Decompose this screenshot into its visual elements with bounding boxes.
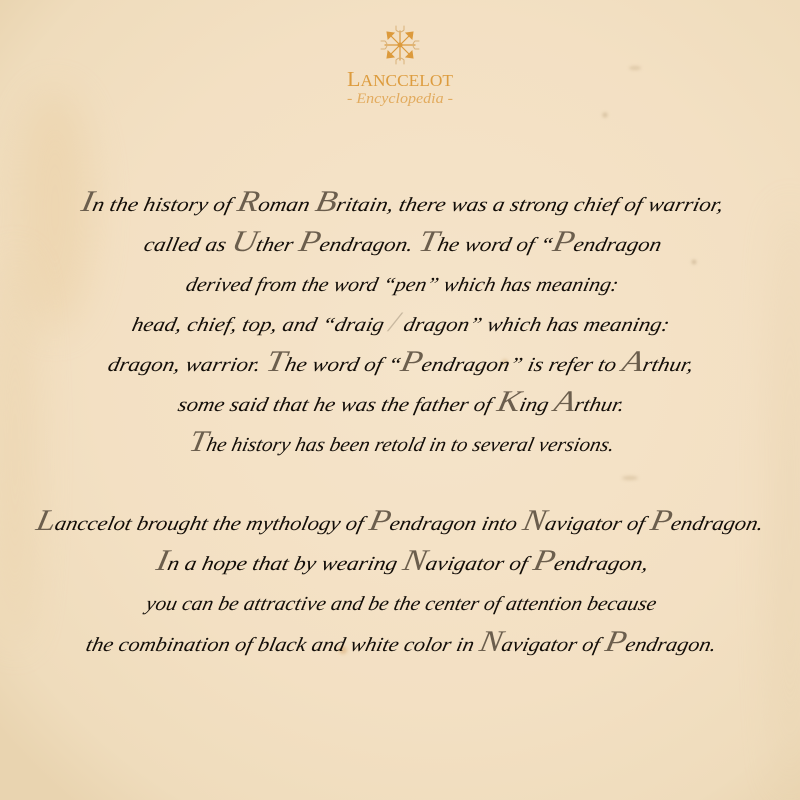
paragraph: history of Pendragon	[77, 184, 728, 458]
paragraph: history of Pendragon: dragon, warrior. The word of “ Pendragon” is refer to Arthur,	[106, 344, 698, 378]
logo name: LANCCELOT	[347, 67, 453, 91]
paragraph: history of Pendragon: some said that he was the father of King Arthur.	[176, 384, 629, 418]
paragraph: Navigator of Pendragon: the combination of black and white color in Navigator of Pendragon.	[84, 624, 721, 658]
paragraph: Navigator of Pendragon: Lanccelot brought the mythology of Pendragon into Navigator of Pendragon.	[32, 503, 768, 537]
paragraph: Navigator of Pendragon	[32, 503, 768, 658]
logo subtitle: - Encyclopedia -	[347, 91, 453, 107]
paragraph: Navigator of Pendragon: you can be attractive and be the center of attention because	[142, 593, 659, 615]
paragraph: history of Pendragon: The history has been retold in to several versions.	[187, 424, 619, 458]
logo	[347, 26, 453, 107]
paragraph: Navigator of Pendragon: In a hope that by wearing Navigator of Pendragon,	[152, 543, 653, 577]
paragraph: history of Pendragon: head, chief, top, and “draig / dragon” which has meaning:	[130, 307, 673, 338]
paragraph: history of Pendragon: derived from the word “pen” which has meaning:	[184, 274, 621, 296]
icon: compass emblem	[381, 26, 419, 64]
paragraph: history of Pendragon: In the history of Roman Britain, there was a strong chief of warrior,	[77, 184, 728, 218]
paragraph: history of Pendragon: called as Uther Pendragon. The word of “ Pendragon	[142, 224, 666, 258]
